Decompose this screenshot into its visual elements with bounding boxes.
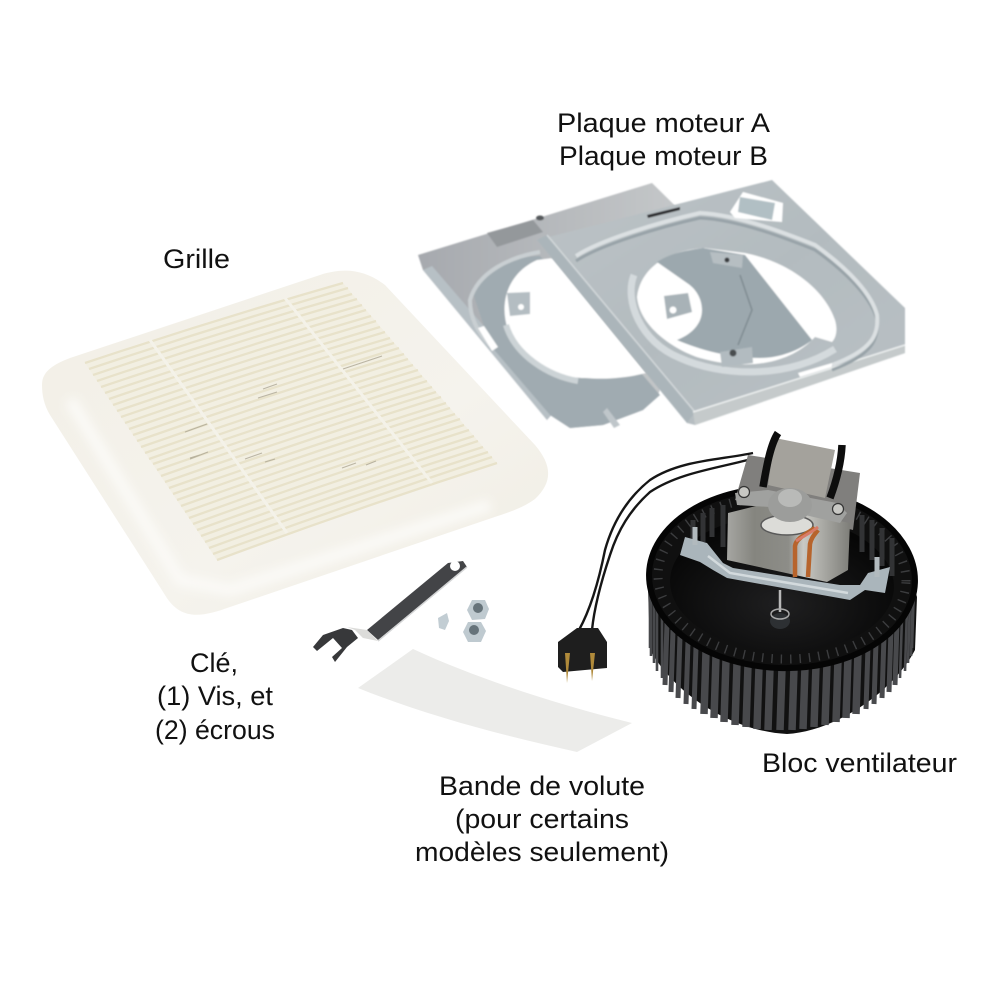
label: volute strip: modèles seulement) — [415, 837, 669, 867]
motor coil — [768, 438, 835, 498]
wrench bend — [347, 627, 378, 641]
plate B — [537, 180, 905, 425]
plate B top slot — [647, 207, 680, 218]
fan rim — [646, 483, 918, 673]
plate B left fold — [537, 235, 695, 423]
label: volute strip — [415, 771, 669, 867]
plate B lower slot — [798, 363, 832, 377]
volute strip — [358, 649, 632, 752]
label: volute strip: Bande de volute — [439, 771, 645, 801]
plug — [558, 628, 607, 683]
heading: motor plates label — [557, 108, 770, 171]
motor copper windings — [795, 528, 818, 577]
plate A — [418, 183, 720, 428]
label: wrench, screw and nuts — [155, 648, 275, 745]
plate A seen through plate B — [657, 248, 812, 358]
fan wires — [579, 453, 755, 630]
plate B ridge — [576, 218, 877, 370]
label: wrench, screw and nuts: (1) Vis, et — [157, 681, 274, 711]
plate A side fold — [423, 266, 556, 420]
plate A lower stamped area — [472, 256, 660, 428]
blower fan wheel — [646, 483, 918, 734]
wrench fork — [313, 628, 358, 662]
screw — [438, 613, 449, 630]
label: wrench, screw and nuts: (2) écrous — [155, 715, 275, 745]
fan inner fins — [655, 493, 909, 663]
fan motor — [680, 433, 890, 629]
fan back fins — [693, 505, 892, 576]
plate B lower tab — [720, 347, 753, 367]
motor lower stator — [727, 505, 850, 582]
motor studs — [695, 527, 877, 577]
plate A tab — [507, 292, 530, 316]
grille slats — [85, 283, 497, 560]
motor top bracket — [735, 490, 847, 523]
motor spring — [761, 515, 813, 535]
heading: grille label: Grille — [163, 244, 230, 274]
plate B upper tab — [710, 252, 743, 268]
motor cross bracket — [680, 537, 890, 600]
wrench — [313, 561, 467, 662]
fan floor — [668, 512, 896, 656]
screw and nuts — [438, 600, 489, 642]
fan outer blades — [704, 652, 858, 730]
motor stator top block — [735, 455, 860, 530]
grille panel — [42, 271, 548, 615]
plate B square cutout — [730, 192, 783, 222]
label: volute strip: (pour certains — [455, 804, 629, 834]
heading: motor plates label: Plaque moteur A — [557, 108, 770, 138]
wrench handle — [367, 561, 467, 640]
nut — [467, 600, 489, 620]
nut — [463, 622, 486, 642]
label: wrench, screw and nuts: Clé, — [190, 648, 238, 678]
plate B hole — [637, 248, 836, 364]
heading: motor plates label: Plaque moteur B — [559, 141, 768, 171]
plate A slot — [478, 326, 498, 351]
plate B front fold — [693, 345, 905, 425]
plate A dark recess — [487, 220, 543, 247]
plate B hole rim — [631, 275, 835, 372]
plug pins — [565, 653, 595, 683]
label: fan assembly: Bloc ventilateur — [762, 748, 957, 778]
motor shaft and nut — [779, 590, 781, 612]
plate A large opening — [505, 258, 646, 379]
